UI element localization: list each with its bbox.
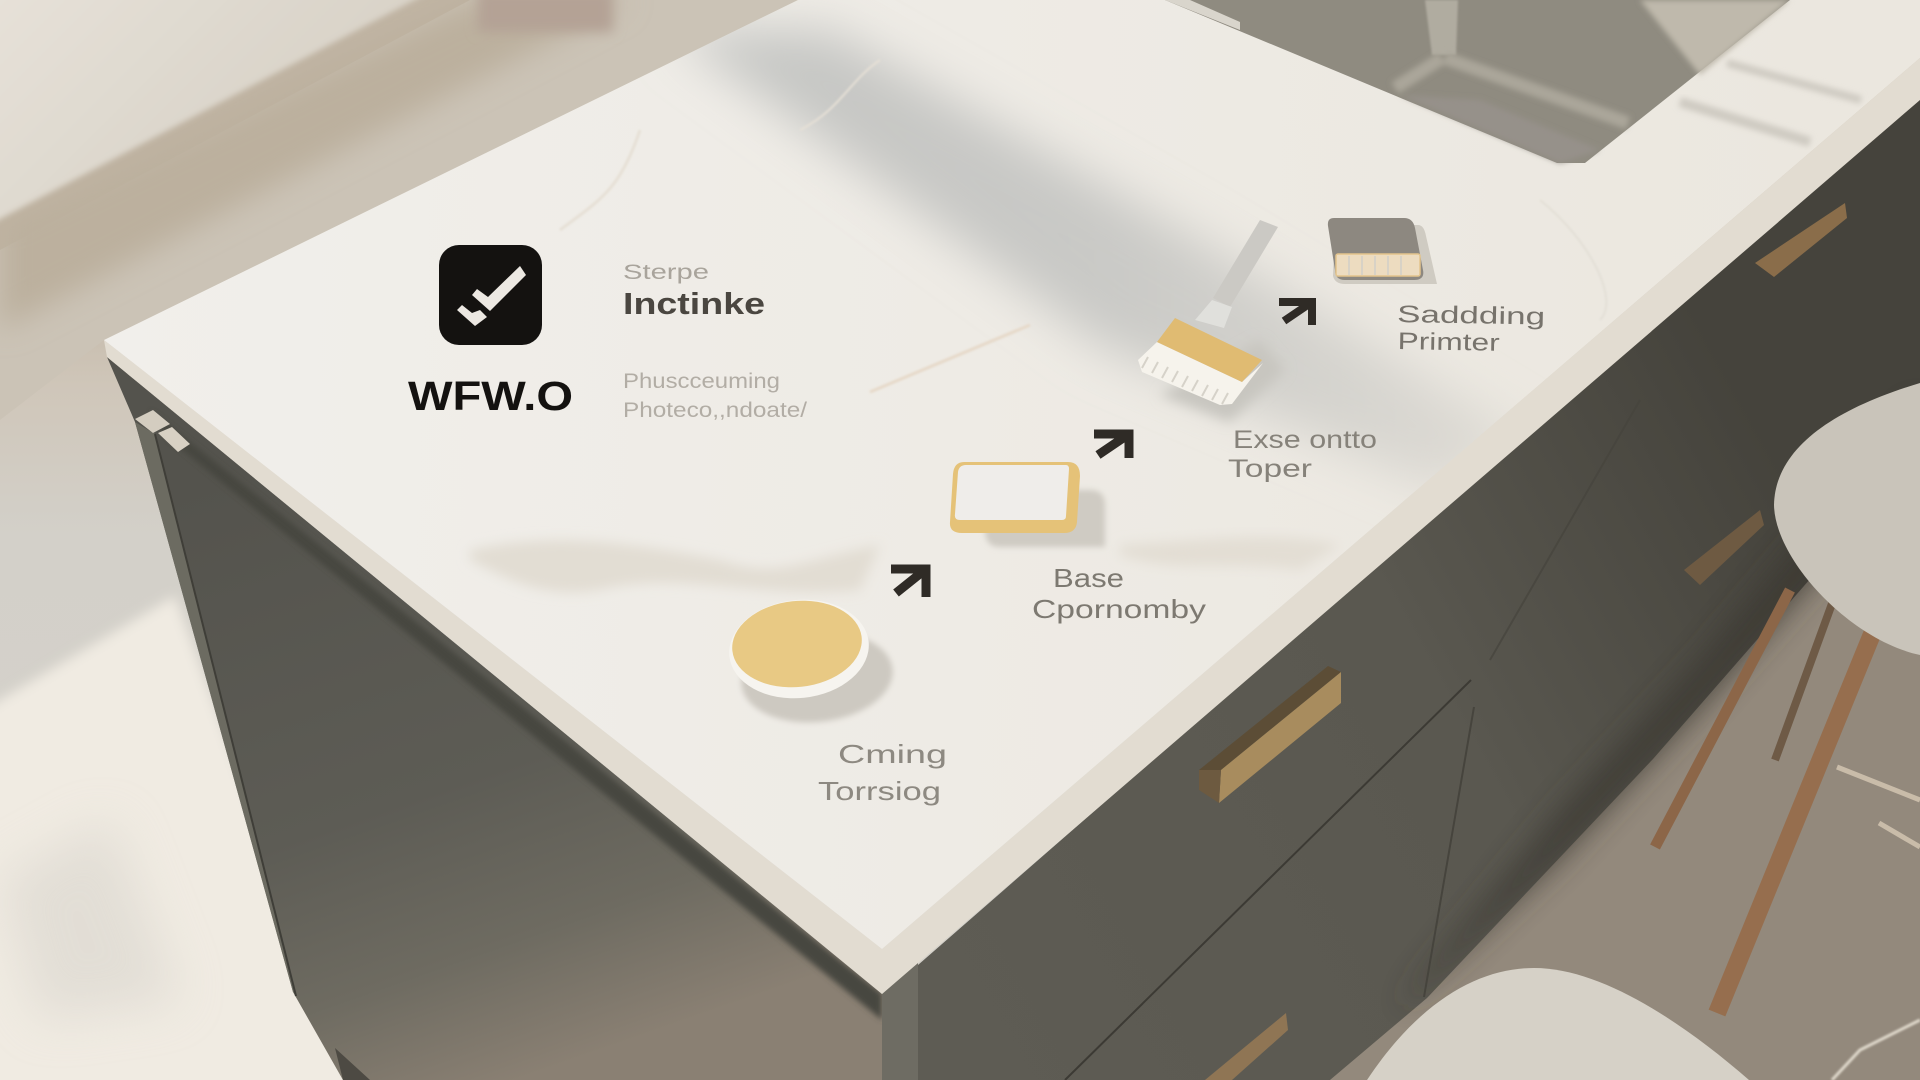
arrow 1 <box>891 569 926 597</box>
cabinet front left <box>107 357 882 1080</box>
arrow 3 <box>1279 302 1312 325</box>
step 3 label: Exse ontto <box>1233 426 1377 454</box>
step 1 label: Cming <box>838 739 947 769</box>
description text <box>623 370 807 422</box>
step 2 label: Base <box>1053 563 1124 593</box>
step 3 label <box>1228 426 1377 483</box>
step 4 label: Primter <box>1397 328 1500 357</box>
step 4 icon: primer card <box>1328 218 1437 284</box>
step 1 label <box>818 739 947 806</box>
step 2 icon: gold-rimmed tile <box>950 462 1105 547</box>
step 4 label: Saddding <box>1397 301 1545 331</box>
floor right <box>1300 450 1920 1080</box>
stool right <box>1655 383 1920 1013</box>
cabinet corner blocks <box>135 410 190 452</box>
step 3 label: Toper <box>1228 455 1312 483</box>
cabinet handle middle <box>1684 510 1764 585</box>
cabinet handle bottom <box>1205 1013 1288 1080</box>
step 1 icon: gold disc <box>724 593 897 730</box>
step 2 label: Cpornomby <box>1032 594 1206 624</box>
marble veins and sunlight shadows <box>470 30 1861 592</box>
description text: Photeco,,ndoate/ <box>623 399 807 422</box>
stool foreground seat <box>1367 968 1749 1080</box>
heading block: Inctinke <box>623 286 765 321</box>
cabinet front right <box>882 90 1920 1080</box>
heading block: Sterpe <box>623 261 709 284</box>
floor mark <box>1832 1020 1920 1080</box>
step 3 icon: brush <box>1138 220 1285 422</box>
cabinet handle large <box>1199 666 1341 803</box>
sink <box>1165 0 1790 163</box>
step 2 label <box>1032 563 1206 624</box>
arrow 2 <box>1094 434 1129 458</box>
logo icon: black check badge <box>439 245 542 345</box>
description text: Phuscceuming <box>623 370 780 393</box>
step 1 label: Torrsiog <box>818 776 941 806</box>
cabinet handle upper <box>1755 203 1847 277</box>
heading block <box>623 261 765 321</box>
step 4 label <box>1396 301 1545 358</box>
brand name: WFW.O <box>408 373 573 419</box>
